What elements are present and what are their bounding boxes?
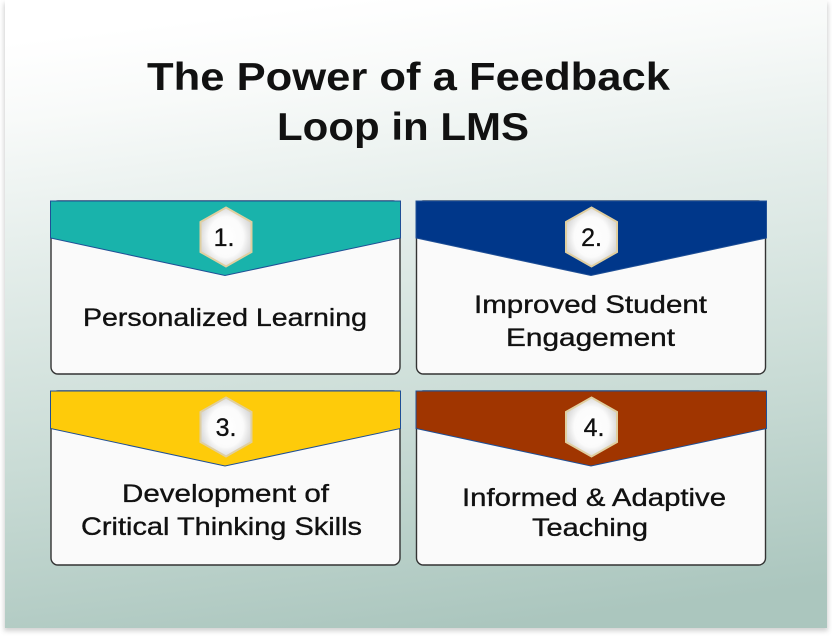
card label: Teaching — [532, 514, 648, 542]
hexagon badge — [200, 208, 252, 266]
card body — [416, 201, 766, 374]
header banner — [50, 201, 400, 276]
panel: card 1 personalized learning — [50, 201, 400, 374]
card body — [416, 391, 766, 565]
hexagon badge — [566, 398, 617, 456]
card body — [51, 201, 400, 374]
hexagon badge — [566, 208, 617, 266]
card label: Personalized Learning — [83, 304, 367, 332]
card body — [51, 391, 400, 565]
badge number: 4. — [584, 414, 604, 442]
header banner — [416, 201, 766, 276]
badge number: 2. — [581, 224, 602, 252]
card label — [81, 480, 362, 541]
card label: Informed & Adaptive — [462, 484, 726, 512]
panel: card 4 informed and adaptive teaching — [416, 391, 766, 565]
card label: Critical Thinking Skills — [81, 513, 362, 541]
hexagon badge — [200, 398, 252, 456]
title: Loop in LMS — [277, 106, 529, 149]
panel: card 2 improved student engagement — [416, 201, 766, 374]
title — [147, 56, 670, 149]
panel: card 3 critical thinking skills — [50, 391, 400, 565]
card label: Engagement — [506, 324, 675, 352]
title: The Power of a Feedback — [147, 56, 670, 99]
header banner — [416, 391, 766, 466]
card label: Development of — [122, 480, 329, 508]
header banner — [50, 391, 400, 466]
badge number: 1. — [214, 224, 234, 252]
card label — [474, 291, 707, 352]
card label — [462, 484, 726, 542]
card label: Improved Student — [474, 291, 707, 319]
badge number: 3. — [216, 414, 236, 442]
